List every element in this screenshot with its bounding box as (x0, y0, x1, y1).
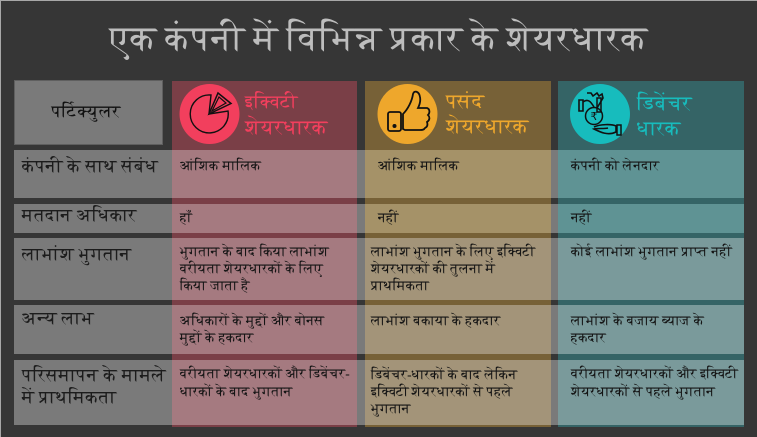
row: dividend payment: प्राथमिकता (371, 278, 429, 293)
row: voting rights: हाँ (180, 210, 192, 225)
heading: preference shareholders: शेयरधारक (446, 116, 529, 138)
heading: equity shareholders (244, 91, 328, 139)
row: company relationship: आंशिक मालिक (180, 158, 261, 173)
row: dividend payment: शेयरधारकों की तुलना में (371, 261, 495, 276)
heading: debenture holders: धारक (637, 118, 681, 140)
row: dividend payment (14, 238, 744, 300)
row: dividend payment: लाभांश भुगतान के लिए इक्विटी (371, 244, 534, 259)
icon: money bag and hand: ₹ (590, 110, 598, 123)
row: dividend payment: भुगतान के बाद किया लाभांश (180, 244, 329, 259)
row: liquidation priority (14, 360, 744, 425)
row: dividend payment: कोई लाभांश भुगतान प्राप्त नहीं (571, 244, 732, 259)
panel: particulars header (14, 80, 163, 145)
row: other benefits: हकदार (571, 330, 606, 345)
row: company relationship: कंपनी के साथ संबंध (22, 156, 158, 176)
row: other benefits: अन्य लाभ (22, 308, 94, 328)
row: liquidation priority: परिसमापन के मामले (22, 365, 166, 385)
row: other benefits: अधिकारों के मुद्दों और बोनस (180, 313, 324, 328)
panel: debenture column (558, 81, 744, 427)
row: voting rights: नहीं (378, 210, 399, 225)
icon: equity pie chart (180, 84, 240, 144)
row: liquidation priority: शेयरधारकों से पहले भुगतान (571, 384, 715, 399)
heading: preference shareholders (445, 91, 530, 138)
panel: preference column (365, 81, 551, 427)
heading: equity shareholders: इक्विटी (245, 93, 297, 113)
row: company relationship: आंशिक मालिक (378, 158, 459, 173)
row: liquidation priority: वरीयता शेयरधारकों और इक्विटी (571, 366, 737, 381)
row: other benefits (14, 305, 744, 354)
row: liquidation priority: भुगतान (371, 401, 411, 416)
row: dividend payment: लाभांश भुगतान (22, 244, 131, 264)
panel: equity column (172, 81, 357, 427)
row: liquidation priority: में प्राथमिकता (22, 387, 116, 407)
row: dividend payment: वरीयता शेयरधारकों के लिए (180, 261, 323, 276)
row: liquidation priority: धारकों के बाद भुगतान (180, 384, 292, 399)
row: liquidation priority: इक्विटी शेयरधारकों से पहले (371, 384, 513, 399)
row: other benefits: लाभांश बकाया के हकदार (371, 313, 500, 328)
row: other benefits: मुद्दों के हकदार (180, 330, 254, 345)
row: voting rights: मतदान अधिकार (22, 205, 137, 225)
row: liquidation priority: वरीयता शेयरधारकों और डिबेंचर- (180, 366, 350, 381)
icon: money bag and hand (570, 84, 630, 144)
heading: debenture holders (636, 92, 693, 140)
title: एक कंपनी में विभिन्न प्रकार के शेयरधारक (110, 19, 647, 58)
heading: preference shareholders: पसंद (446, 91, 484, 113)
row: company relationship (14, 150, 744, 198)
row: dividend payment: किया जाता है (180, 278, 250, 293)
row: voting rights: नहीं (571, 210, 592, 225)
heading: equity shareholders: शेयरधारक (245, 117, 328, 139)
row: company relationship: कंपनी को लेनदार (571, 158, 659, 173)
icon: thumbs up (378, 84, 438, 144)
heading: debenture holders: डिबेंचर (637, 93, 692, 115)
panel: particulars header: पर्टिक्युलर (51, 101, 121, 121)
row: liquidation priority: डिबेंचर-धारकों के बाद लेकिन (371, 367, 517, 382)
row: voting rights (14, 204, 744, 233)
row: other benefits: लाभांश के बजाय ब्याज के (571, 313, 704, 328)
